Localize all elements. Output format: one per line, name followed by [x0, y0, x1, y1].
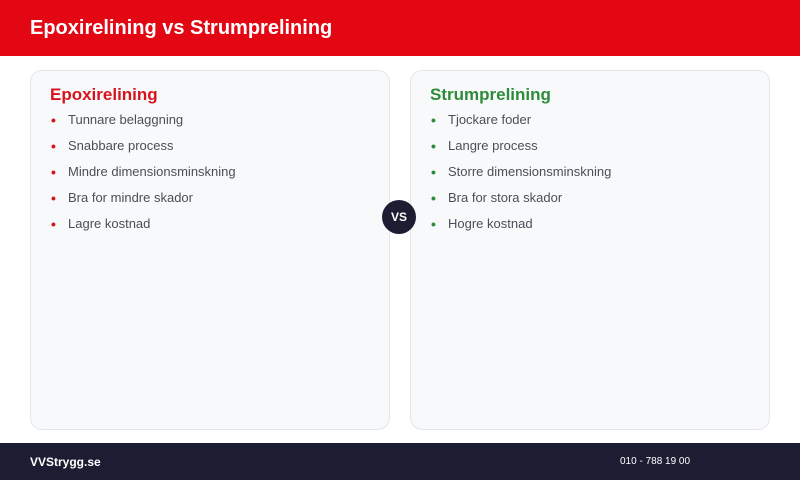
list: epoxi features: Lagre kostnad: [68, 216, 150, 231]
list: epoxi features: •: [51, 164, 56, 180]
heading: strumprelining: Strumprelining: [430, 85, 551, 104]
footer brand: VVStrygg.se: [30, 455, 101, 469]
header: [0, 0, 800, 56]
heading: epoxirelining: Epoxirelining: [50, 85, 158, 104]
list: strump features: Tjockare foder: [448, 112, 531, 127]
footer phone: 010 - 788 19 00: [620, 456, 690, 467]
vs badge: [382, 200, 416, 234]
list: strump features: Hogre kostnad: [448, 216, 533, 231]
vs badge: VS: [391, 210, 407, 224]
panel: epoxirelining: [30, 70, 390, 430]
panel: strumprelining: [410, 70, 770, 430]
list: strump features: •: [431, 216, 436, 232]
list: strump features: •: [431, 190, 436, 206]
list: strump features: [431, 112, 611, 232]
list: epoxi features: Bra for mindre skador: [68, 190, 193, 205]
title: Epoxirelining vs Strumprelining: [30, 17, 332, 39]
list: strump features: •: [431, 138, 436, 154]
list: epoxi features: •: [51, 138, 56, 154]
list: strump features: Storre dimensionsminskning: [448, 164, 611, 179]
footer: [0, 443, 800, 480]
list: epoxi features: Tunnare belaggning: [68, 112, 183, 127]
list: strump features: Bra for stora skador: [448, 190, 562, 205]
list: epoxi features: [51, 112, 236, 232]
list: epoxi features: Snabbare process: [68, 138, 174, 153]
list: strump features: •: [431, 164, 436, 180]
list: epoxi features: •: [51, 216, 56, 232]
list: strump features: Langre process: [448, 138, 538, 153]
list: epoxi features: Mindre dimensionsminskning: [68, 164, 236, 179]
list: epoxi features: •: [51, 112, 56, 128]
list: epoxi features: •: [51, 190, 56, 206]
list: strump features: •: [431, 112, 436, 128]
